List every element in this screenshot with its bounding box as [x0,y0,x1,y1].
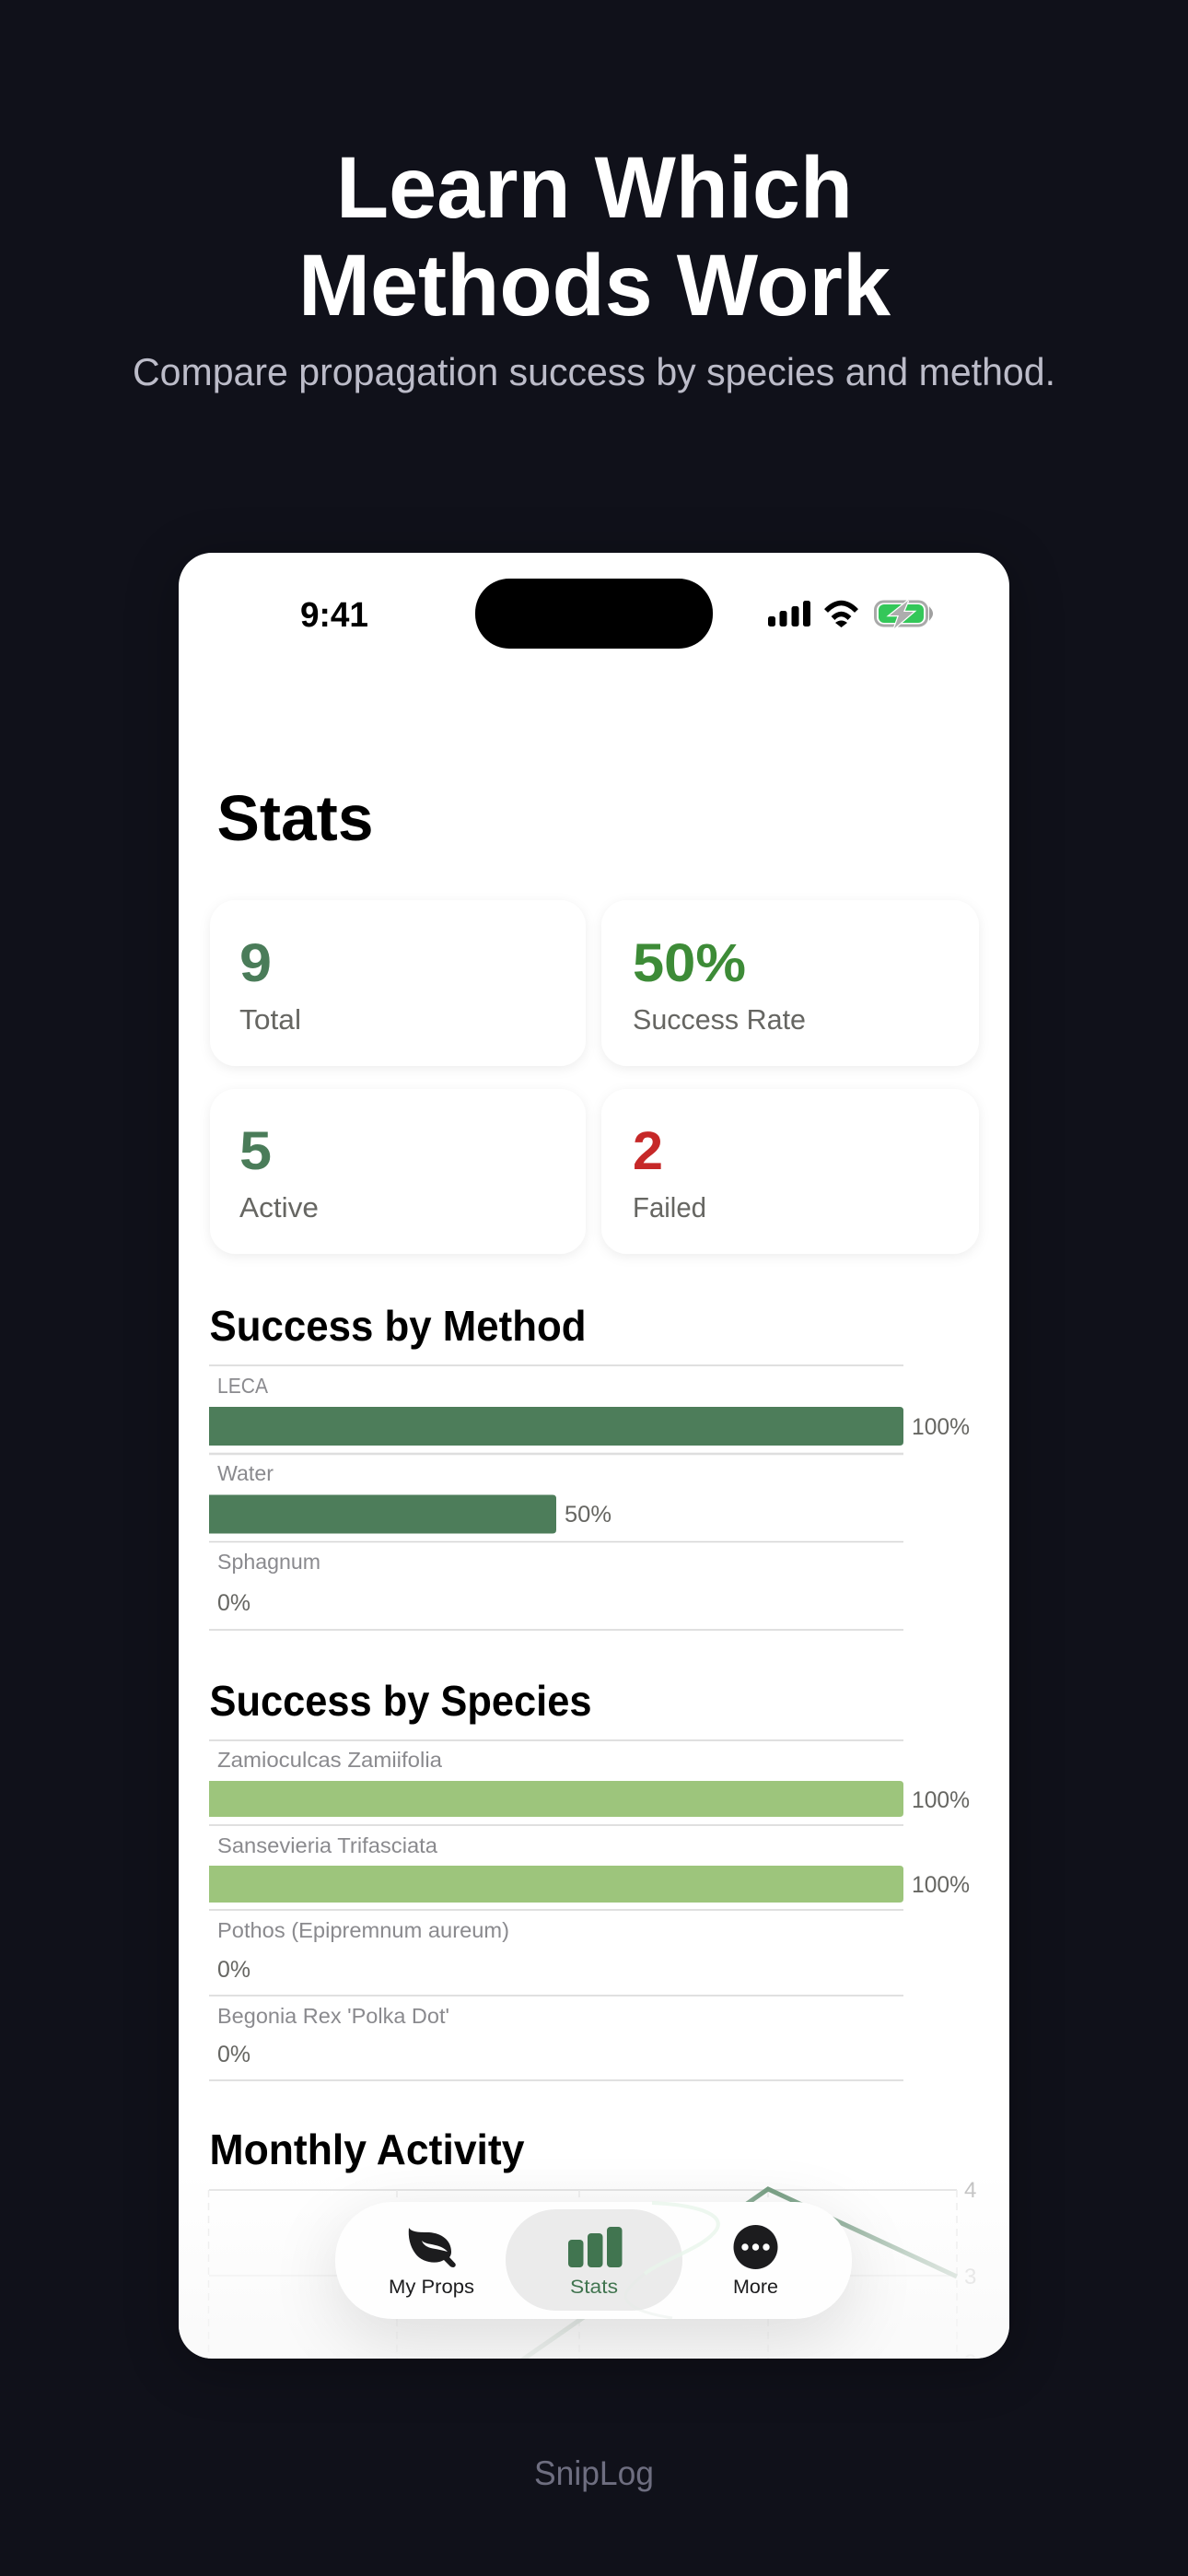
section heading: success by method: Success by Method [210,1302,586,1350]
row: Sansevieria [209,1833,970,1903]
card: failed: Failed [633,1191,706,1224]
brand name: SnipLog [534,2454,654,2492]
tab: more [733,2225,778,2298]
subtitle: Compare propagation success by species and method. [133,350,1055,393]
row: Sphagnum [218,1553,319,1610]
icon: more [733,2225,777,2269]
data line [521,2186,958,2359]
glass refraction [625,2203,718,2318]
icon: leaf [409,2228,456,2267]
row: Begonia [218,2008,448,2062]
phone screen [179,553,1009,2447]
section heading: monthly activity: Monthly Activity [210,2125,525,2173]
card: total: Total [239,1003,301,1036]
card: failed [600,1119,980,1257]
tab bar pill [335,2202,852,2319]
card: total [210,931,586,1069]
row: Water: Water [217,1461,274,1485]
row: Pothos: 0% [217,1957,250,1983]
tab: my props [389,2228,474,2298]
section heading: success by species: Success by Species [210,1677,591,1725]
row: Pothos: Pothos (Epipremnum aureum) [217,1918,509,1942]
status bar [300,579,932,649]
card: failed: 2 [633,1121,663,1181]
row: Begonia: Begonia Rex 'Polka Dot' [217,2004,449,2028]
row: Sansevieria: 100% [912,1872,970,1898]
row: Water: 50% [565,1502,611,1528]
card: success rate: 50% [633,933,746,993]
tab bar [335,2202,852,2319]
row: LECA: 100% [912,1414,970,1440]
icon: signal [768,601,810,626]
selected tab highlight [506,2209,682,2311]
stat cards [210,900,979,1254]
icon: battery [875,601,932,628]
row: LECA [209,1374,970,1446]
row: Pothos [218,1922,508,1977]
label: Stats [570,2277,618,2298]
row: Water [209,1461,611,1533]
card: active: 5 [239,1121,272,1181]
axis label 3: 3 [964,2265,976,2289]
line chart: monthly activity [208,2182,976,2359]
bottom fade [179,2170,1009,2359]
row: Begonia: 0% [217,2042,250,2067]
label: More [733,2277,778,2298]
card: success rate [600,931,980,1069]
axis label 2: 2 [964,2350,976,2375]
card: active: Active [239,1191,319,1224]
row: Zamioculcas [209,1748,970,1817]
tab bar shadow [335,2220,852,2337]
axis label 4: 4 [964,2178,976,2203]
phone shadow [179,562,1009,2368]
icon: bars [568,2227,623,2267]
row: Zamioculcas: Zamioculcas Zamiifolia [217,1748,442,1772]
clock: 9:41 [300,596,368,635]
row: LECA: LECA [217,1374,269,1398]
tab: stats [568,2227,623,2298]
card: active [210,1119,586,1257]
row: Sphagnum: Sphagnum [217,1550,320,1574]
title: Methods Work [298,237,891,334]
row: Sansevieria: Sansevieria Trifasciata [217,1833,437,1857]
dynamic island [475,579,713,649]
card: success rate: Success Rate [633,1003,806,1036]
screen background [179,553,1009,2359]
card: total: 9 [239,933,272,993]
screen heading: Stats [217,782,374,854]
bar chart: success by species [209,1740,970,2080]
title: Learn Which [336,139,853,237]
bar chart: success by method [209,1365,970,1630]
row: Zamioculcas: 100% [912,1787,970,1813]
title [298,139,891,334]
label: My Props [389,2277,474,2298]
icon: wifi [826,603,856,627]
row: Sphagnum: 0% [217,1590,250,1616]
